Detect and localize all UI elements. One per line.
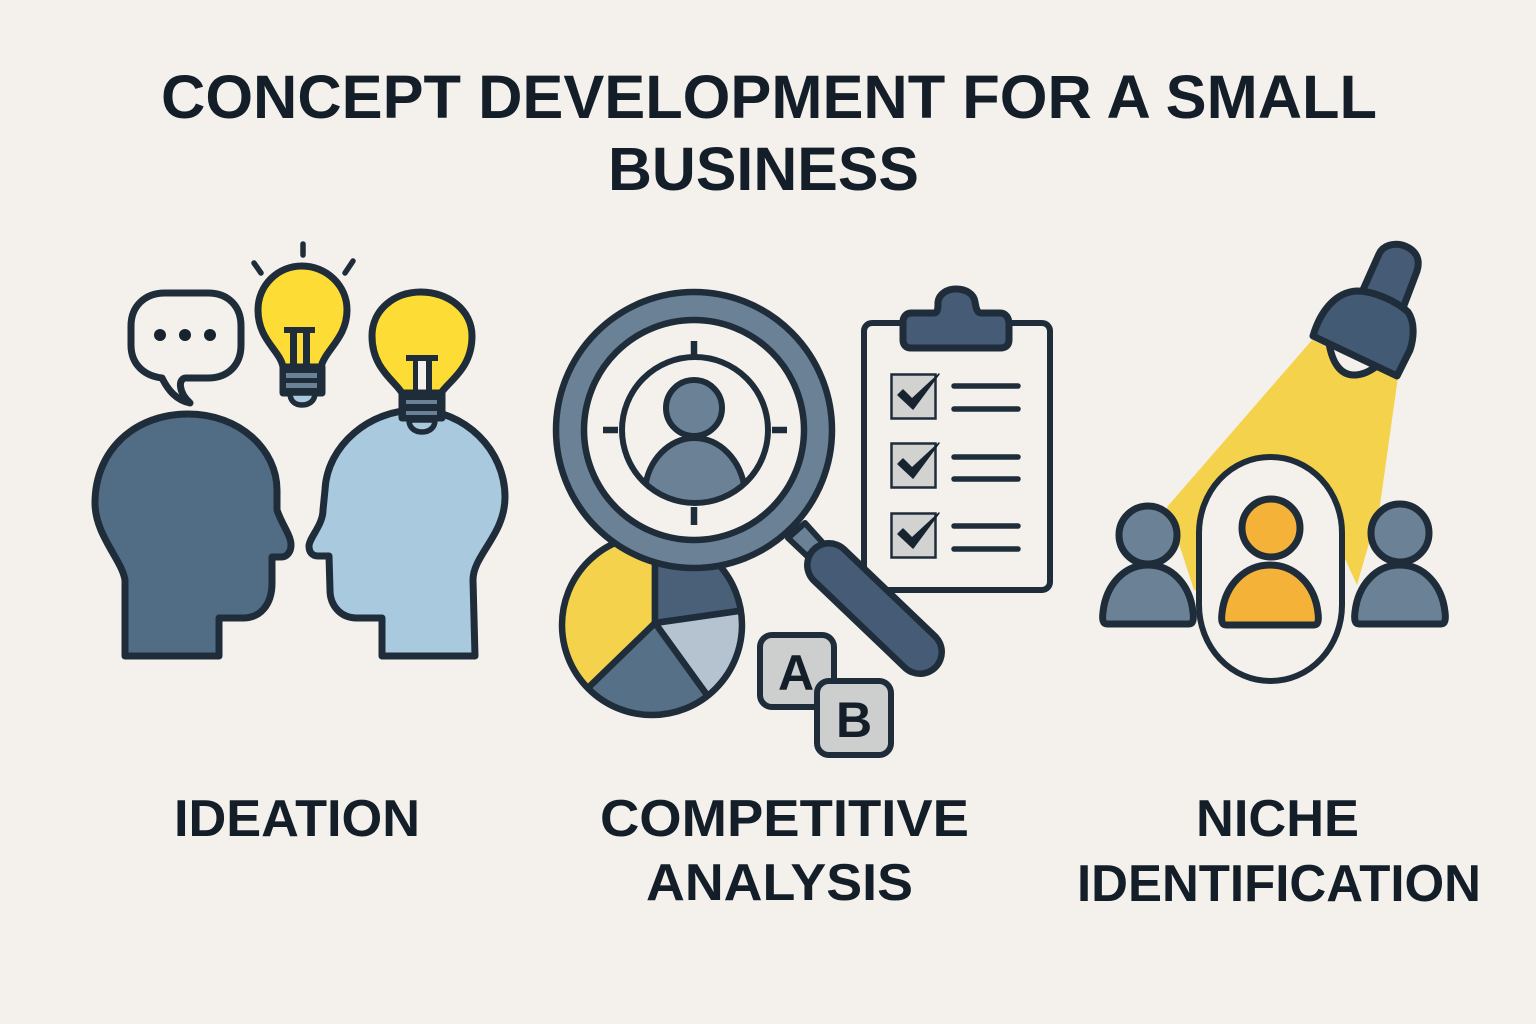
title: CONCEPT DEVELOPMENT FOR A SMALL [161, 63, 1377, 131]
label: competitive analysis [600, 790, 969, 912]
icon: highlighted capsule [1199, 457, 1342, 681]
label: niche identification: IDENTIFICATION [1077, 855, 1481, 913]
icon: right person [1355, 504, 1445, 624]
panel: niche identification illustration [1103, 244, 1445, 681]
icon: spotlight lamp [1313, 244, 1418, 376]
label: niche identification [1077, 790, 1481, 913]
icon: clipboard checklist [864, 289, 1050, 590]
checklist item 3 [892, 513, 1018, 558]
icon: light head [309, 410, 505, 656]
label: ideation: IDEATION [174, 790, 420, 848]
icon: dark head [95, 414, 291, 656]
title: BUSINESS [608, 135, 919, 203]
icon: speech bubble [131, 293, 241, 403]
checklist item 2 [892, 443, 1018, 488]
chart: pie chart [558, 542, 746, 718]
panel: ideation illustration [95, 244, 505, 656]
checklist item 1 [892, 374, 1018, 418]
icon: highlighted person [1222, 499, 1318, 625]
icon: magnifying glass with target person [556, 292, 920, 652]
icon: A/B test tiles: A [778, 645, 814, 701]
label: competitive analysis: COMPETITIVE [600, 790, 969, 848]
icon: floating light bulb [254, 244, 353, 405]
icon: left person [1103, 506, 1193, 624]
icon: A/B test tiles: B [836, 692, 872, 748]
infographic canvas [92, 75, 1478, 902]
icon: spotlight beam [1167, 340, 1398, 590]
label: competitive analysis: ANALYSIS [646, 854, 913, 912]
title [161, 63, 1377, 203]
icon: light bulb on head [372, 292, 472, 432]
label: niche identification: NICHE [1196, 790, 1359, 848]
panel: competitive analysis illustration [540, 289, 1050, 755]
icon: A/B test tiles [760, 635, 891, 755]
